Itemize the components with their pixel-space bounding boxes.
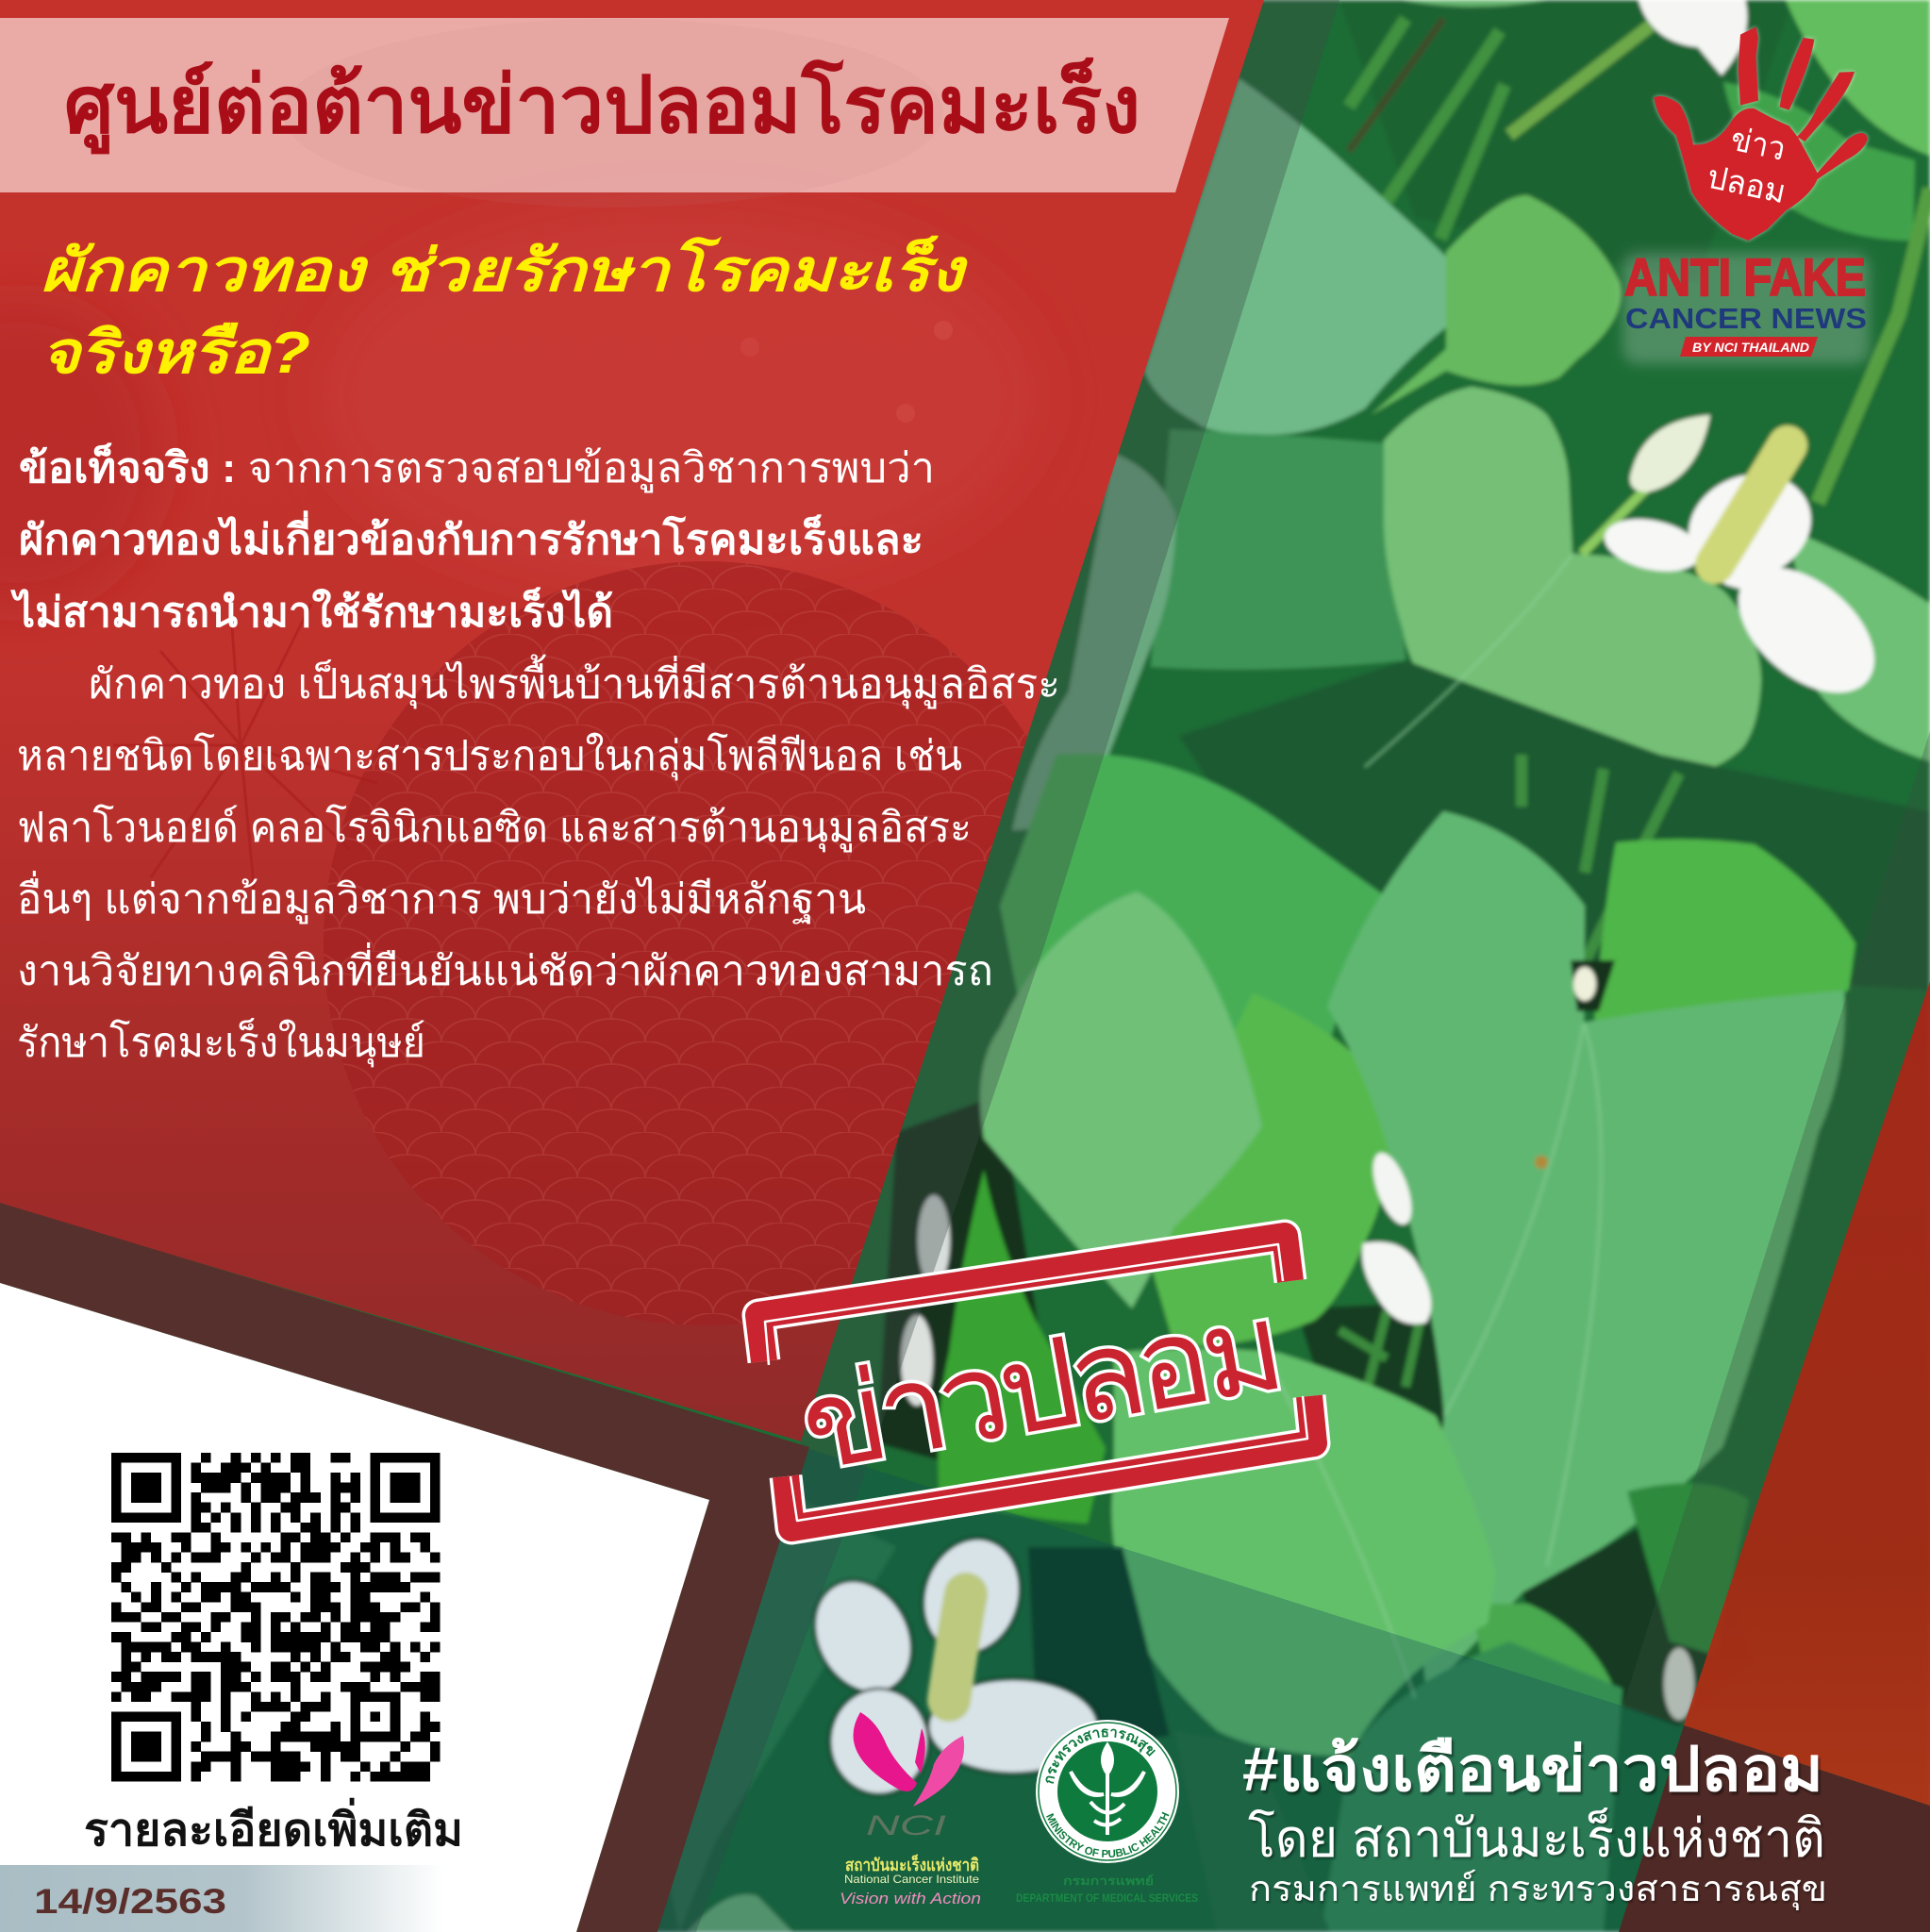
- bottom flower: [796, 1526, 1098, 1794]
- logo: anti fake cancer news: [1622, 26, 1870, 364]
- CANCER NEWS wordmark: CANCER NEWS: [1625, 302, 1867, 335]
- body text: ข้อเท็จจริง : จากการตรวจสอบข้อมูลวิชาการพบว่า: [19, 442, 935, 493]
- question heading: [41, 235, 969, 386]
- body text: ผักคาวทองไม่เกี่ยวข้องกับการรักษาโรคมะเร็งและ: [19, 510, 923, 563]
- BY NCI THAILAND badge: BY NCI THAILAND: [1692, 340, 1809, 355]
- dark brown diagonal band: [0, 1203, 809, 1932]
- bottom dark teal overlay band: [657, 1445, 1684, 1932]
- title text: ศูนย์ต่อต้านข่าวปลอมโรคมะเร็ง: [64, 57, 1140, 155]
- bottom-right brown band: [1619, 1725, 1930, 1932]
- mid-right white flower cluster: [1365, 1148, 1420, 1229]
- icon: red hand: [1654, 26, 1868, 241]
- logo: national cancer institute: NCI: [866, 1810, 946, 1841]
- hand label text: [1704, 122, 1789, 210]
- upper dark foliage and stems: [1339, 0, 1792, 283]
- leaf: lower-left deep green: [1000, 754, 1389, 1132]
- dark translucent diagonal band: [657, 0, 1339, 1932]
- icon: pink butterfly wings: [853, 1712, 964, 1807]
- orange spot: [1535, 1156, 1548, 1169]
- QR caption: รายละเอียดเพิ่มเติม: [84, 1797, 463, 1856]
- logo: ministry of public health seal: กระทรวงสาธารณสุข: [1045, 1728, 1156, 1784]
- body text: ไม่สามารถนำมาใช้รักษามะเร็งได้: [10, 587, 613, 636]
- leaf below stamp: [1112, 1349, 1496, 1757]
- hashtag footer text: โดย สถาบันมะเร็งแห่งชาติ: [1248, 1807, 1825, 1868]
- logo: ministry of public health seal: MINISTRY OF PUBLIC HEALTH: [1046, 1811, 1170, 1857]
- ANTI FAKE wordmark: ANTI FAKE: [1624, 247, 1866, 307]
- title band: [0, 18, 1229, 208]
- dark leaf behind band: [1151, 429, 1406, 670]
- bright green left leaf: [938, 1170, 1106, 1524]
- logo: national cancer institute: [840, 1712, 981, 1907]
- body text: หลายชนิดโดยเฉพาะสารประกอบในกลุ่มโพลีฟีนอล เช่น: [17, 732, 962, 781]
- hashtag footer text: #แจ้งเตือนข่าวปลอม: [1242, 1734, 1823, 1804]
- body text: ผักคาวทอง เป็นสมุนไพรพื้นบ้านที่มีสารต้านอนุมูลอิสระ: [89, 654, 1060, 709]
- body text: ฟลาโวนอยด์ คลอโรจินิกแอซิด และสารต้านอนุมูลอิสระ: [17, 804, 972, 853]
- BY NCI THAILAND badge: [1680, 337, 1818, 357]
- right white flower: [1600, 458, 1897, 717]
- question heading: จริงหรือ?: [41, 321, 310, 386]
- top white flower: [1639, 0, 1747, 75]
- stamp: fake news: [758, 1236, 1314, 1528]
- date strip: [0, 1865, 443, 1932]
- date text: 14/9/2563: [34, 1882, 226, 1921]
- department caption: [1016, 1874, 1198, 1905]
- far right leaf: [1786, 528, 1930, 761]
- small bright leaf: [1371, 195, 1621, 415]
- lower teal leaf: [1321, 1641, 1622, 1932]
- logo: national cancer institute: สถาบันมะเร็งแห่งชาติ: [845, 1854, 979, 1874]
- body text: งานวิจัยทางคลินิกที่ยืนยันแน่ชัดว่าผักคาวทองสามารถ: [17, 941, 993, 994]
- body text: อื่นๆ แต่จากข้อมูลวิชาการ พบว่ายังไม่มีหลักฐาน: [17, 870, 866, 924]
- hand label text: ข่าว: [1727, 122, 1789, 168]
- hand label text: ปลอม: [1704, 159, 1789, 210]
- hashtag footer text: [1242, 1734, 1827, 1910]
- leaf: bright inner: [1140, 993, 1392, 1346]
- department caption: DEPARTMENT OF MEDICAL SERVICES: [1016, 1891, 1198, 1905]
- lower dark: [1028, 1547, 1170, 1755]
- lower dark shadow: [1179, 660, 1930, 991]
- upper left sage leaf: [1144, 78, 1503, 435]
- icon: caduceus with wings: [1071, 1745, 1144, 1835]
- bud and stem: [1582, 489, 1646, 554]
- hashtag footer text: กรมการแพทย์ กระทรวงสาธารณสุข: [1249, 1869, 1827, 1910]
- bright right leaf: [1594, 839, 1855, 1024]
- stamp text: ข่าวปลอม: [791, 1276, 1294, 1496]
- question heading: ผักคาวทอง ช่วยรักษาโรคมะเร็ง: [41, 235, 969, 304]
- virus spikes: [113, 604, 377, 896]
- body text: [10, 442, 1060, 1068]
- dark left gap with white ovals: [877, 1094, 1038, 1472]
- logo: ministry of public health seal: [1016, 1720, 1198, 1905]
- gap right of J: [1296, 1302, 1453, 1434]
- right red diagonal panel: [1684, 981, 1930, 1806]
- panel: red diagonal background left: [0, 0, 1264, 1441]
- body text: รักษาโรคมะเร็งในมนุษย์: [17, 1018, 425, 1068]
- department caption: กรมการแพทย์: [1063, 1874, 1154, 1888]
- QR code: [111, 1453, 440, 1781]
- veins: [1264, 554, 1601, 1698]
- translucent right band: [1622, 731, 1930, 1725]
- leaf: large light left: [980, 891, 1262, 1308]
- right lower shadow area: [1522, 1500, 1755, 1726]
- heart leaf with flower: [1365, 387, 1761, 771]
- logo: national cancer institute: Vision with Action: [840, 1890, 981, 1907]
- main big leaf: [1327, 811, 1845, 1693]
- logo: national cancer institute: National Cancer Institute: [844, 1873, 979, 1886]
- panel: white QR card: [0, 1283, 709, 1932]
- raspberry cell illustration: [324, 561, 1088, 1325]
- bud gap at leaf sinus: [1571, 960, 1615, 1011]
